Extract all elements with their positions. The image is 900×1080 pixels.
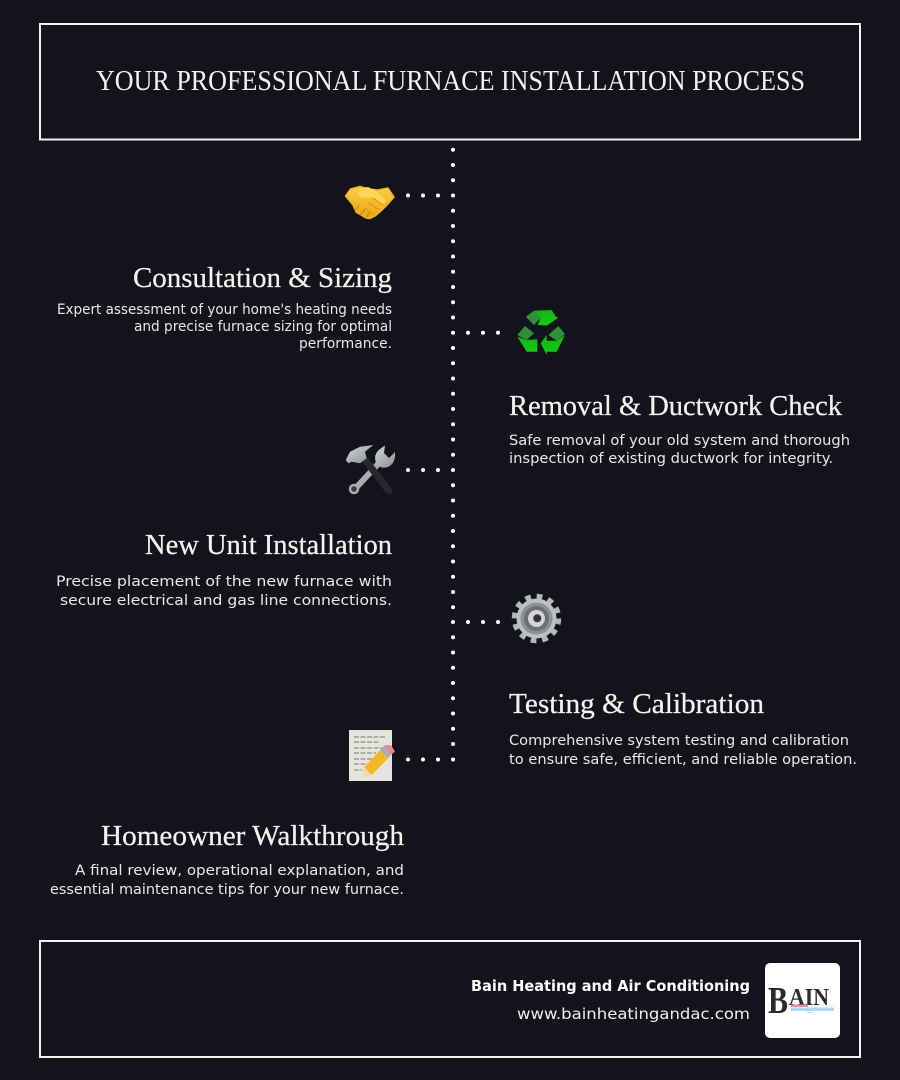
logo: [765, 963, 840, 1038]
heading and text: consultation: performance.: [299, 336, 392, 352]
connector: testing: [466, 620, 500, 624]
company name: Bain Heating and Air Conditioning: [471, 977, 750, 995]
heading and text: consultation: [57, 262, 392, 352]
heading and text: consultation: Consultation & Sizing: [133, 262, 392, 294]
heading and text: removal: Safe removal of your old system and thorough: [509, 433, 850, 449]
heading and text: installation: Precise placement of the new furnace with: [56, 574, 392, 590]
heading and text: installation: secure electrical and gas line connections.: [60, 593, 392, 609]
heading and text: testing: Comprehensive system testing and calibration: [509, 733, 849, 749]
heading and text: walkthrough: essential maintenance tips for your new furnace.: [50, 882, 404, 898]
heading and text: consultation: and precise furnace sizing for optimal: [134, 319, 392, 335]
connector: installation: [406, 468, 440, 472]
connector: walkthrough: [406, 758, 440, 762]
icon: gear: [515, 597, 558, 640]
heading and text: testing: Testing & Calibration: [509, 688, 764, 720]
heading and text: walkthrough: [50, 820, 404, 898]
title banner: [40, 24, 860, 140]
heading and text: consultation: Expert assessment of your home's heating needs: [57, 302, 392, 318]
icon: memo and pencil: [349, 730, 395, 781]
heading and text: walkthrough: Homeowner Walkthrough: [101, 820, 404, 852]
connector: removal: [466, 331, 500, 335]
website: www.bainheatingandac.com: [517, 1005, 750, 1023]
icon: hammer and wrench: [346, 445, 395, 493]
footer banner: [40, 941, 860, 1057]
heading and text: walkthrough: A final review, operational explanation, and: [75, 863, 404, 879]
heading and text: removal: inspection of existing ductwork for integrity.: [509, 451, 833, 467]
heading and text: removal: Removal & Ductwork Check: [509, 390, 842, 422]
heading and text: installation: New Unit Installation: [145, 529, 392, 561]
title: YOUR PROFESSIONAL FURNACE INSTALLATION PROCESS: [96, 65, 805, 97]
heading and text: removal: [509, 390, 850, 467]
icon: recycling symbol: [517, 310, 565, 355]
logo: AIN: [789, 985, 830, 1011]
heading and text: testing: [509, 688, 857, 768]
heading and text: installation: [56, 529, 392, 609]
icon: handshake: [346, 186, 394, 218]
heading and text: testing: to ensure safe, efficient, and reliable operation.: [509, 752, 857, 768]
logo: B: [768, 980, 788, 1022]
connector: consultation: [406, 194, 440, 198]
dotted timeline: [451, 148, 455, 761]
